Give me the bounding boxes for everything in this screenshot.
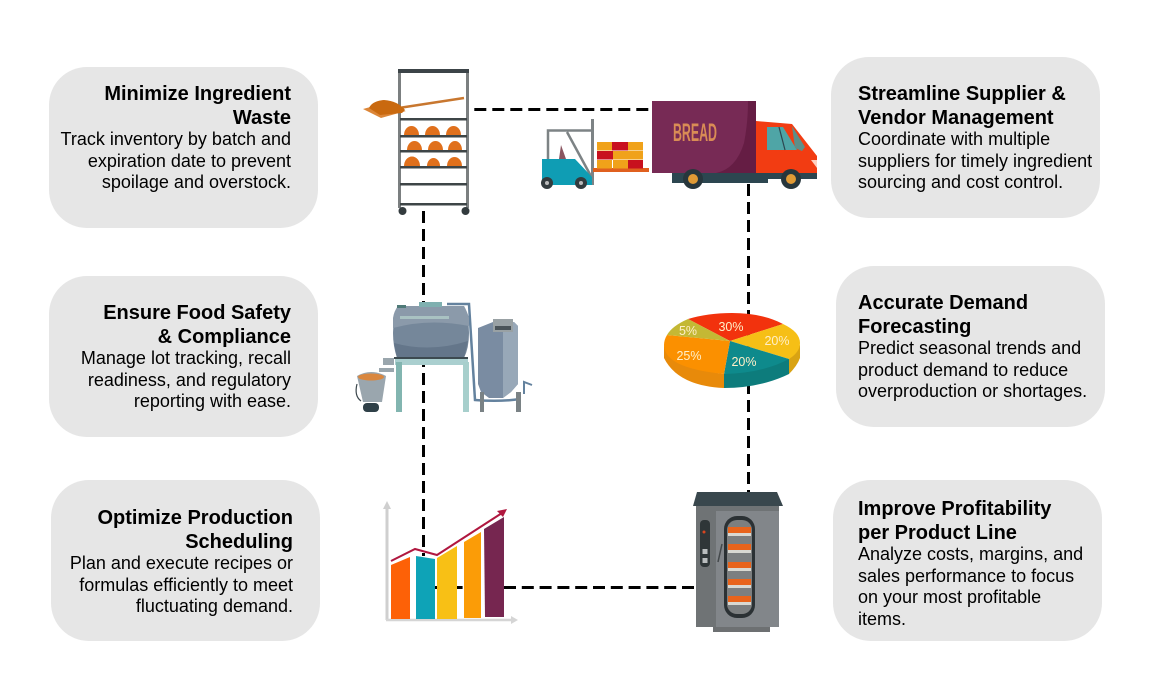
text: improve profitability description: items. [858,609,906,629]
icon: food processing tanks [356,302,532,412]
panel: ensure food safety and compliance [49,276,318,437]
icon: storage tank [478,319,532,412]
pie labels: 20% [731,355,757,369]
panel: optimize production scheduling [51,480,320,641]
text: improve profitability description [858,544,1083,629]
pie labels: 5% [679,324,697,338]
heading: streamline supplier: Vendor Management [858,107,1054,129]
text: streamline supplier description: sourcing and cost control. [858,172,1063,192]
text: accurate demand description: Predict seasonal trends and [858,338,1081,358]
text: optimize production description: fluctuating demand. [136,596,293,616]
pie labels: 25% [676,349,702,363]
heading: improve profitability: Improve Profitability [858,498,1051,520]
text: ensure food safety description: readiness, and regulatory [88,370,291,390]
icon: bread delivery truck [652,101,817,189]
heading: minimize ingredient waste: Minimize Ingredient [104,83,291,105]
heading: streamline supplier: Streamline Supplier & [858,83,1066,105]
text: improve profitability description: Analyze costs, margins, and [858,544,1083,564]
text: accurate demand description: overproduction or shortages. [858,381,1087,401]
bar chart with trend arrow [383,501,518,624]
panel: streamline supplier and vendor management [831,57,1100,218]
icon: rack oven [693,492,783,632]
heading: optimize production scheduling: Optimize Production [97,507,293,529]
heading: improve profitability [858,498,1052,544]
text: optimize production description: Plan and execute recipes or [70,553,293,573]
heading: accurate demand forecasting: Forecasting [858,316,971,338]
icon: bakery rack with bread [363,69,470,215]
text: minimize ingredient waste description: Track inventory by batch and [61,129,291,149]
heading: ensure food safety: & Compliance [158,326,291,348]
panel: minimize ingredient waste [49,67,318,228]
text: ensure food safety description [81,348,291,411]
text: streamline supplier description: suppliers for timely ingredient [858,151,1092,171]
connector: rack to truck [474,108,652,111]
text: ensure food safety description: Manage lot tracking, recall [81,348,291,368]
text: improve profitability description: sales performance to focus [858,566,1074,586]
text: improve profitability description: on your most profitable [858,587,1041,607]
heading: optimize production scheduling [97,507,293,553]
icon: collecting bucket [356,372,386,412]
text: minimize ingredient waste description: spoilage and overstock. [102,172,291,192]
heading: improve profitability: per Product Line [858,522,1017,544]
text: streamline supplier description [858,129,1092,192]
heading: accurate demand forecasting [858,292,1028,338]
text: optimize production description: formulas efficiently to meet [79,575,293,595]
pie chart [664,313,800,388]
pie labels: 30% [718,320,744,334]
text: minimize ingredient waste description [60,129,291,192]
text: optimize production description [70,553,293,616]
pie labels [676,320,790,369]
heading: minimize ingredient waste: Waste [233,107,291,129]
text: streamline supplier description: Coordinate with multiple [858,129,1050,149]
icon: bread delivery truck: BREAD [673,119,717,147]
pie labels: 20% [764,334,790,348]
text: minimize ingredient waste description: expiration date to prevent [88,151,291,171]
panel: improve profitability per product line [833,480,1102,641]
connector: truck down to oven [747,184,750,492]
text: accurate demand description: product demand to reduce [858,360,1068,380]
icon: forklift with crates [541,119,649,189]
heading: ensure food safety [103,302,291,348]
icon: bread peel [363,98,464,118]
panel: accurate demand forecasting [836,266,1105,427]
heading: minimize ingredient waste [104,83,291,129]
text: ensure food safety description: reporting with ease. [134,391,291,411]
heading: optimize production scheduling: Scheduling [185,531,293,553]
heading: ensure food safety: Ensure Food Safety [103,302,291,324]
connector: chart to oven [433,586,696,589]
text: accurate demand description [858,338,1087,401]
connector: rack down to chart [422,211,425,556]
heading: accurate demand forecasting: Accurate Demand [858,292,1028,314]
heading: streamline supplier [858,83,1066,129]
